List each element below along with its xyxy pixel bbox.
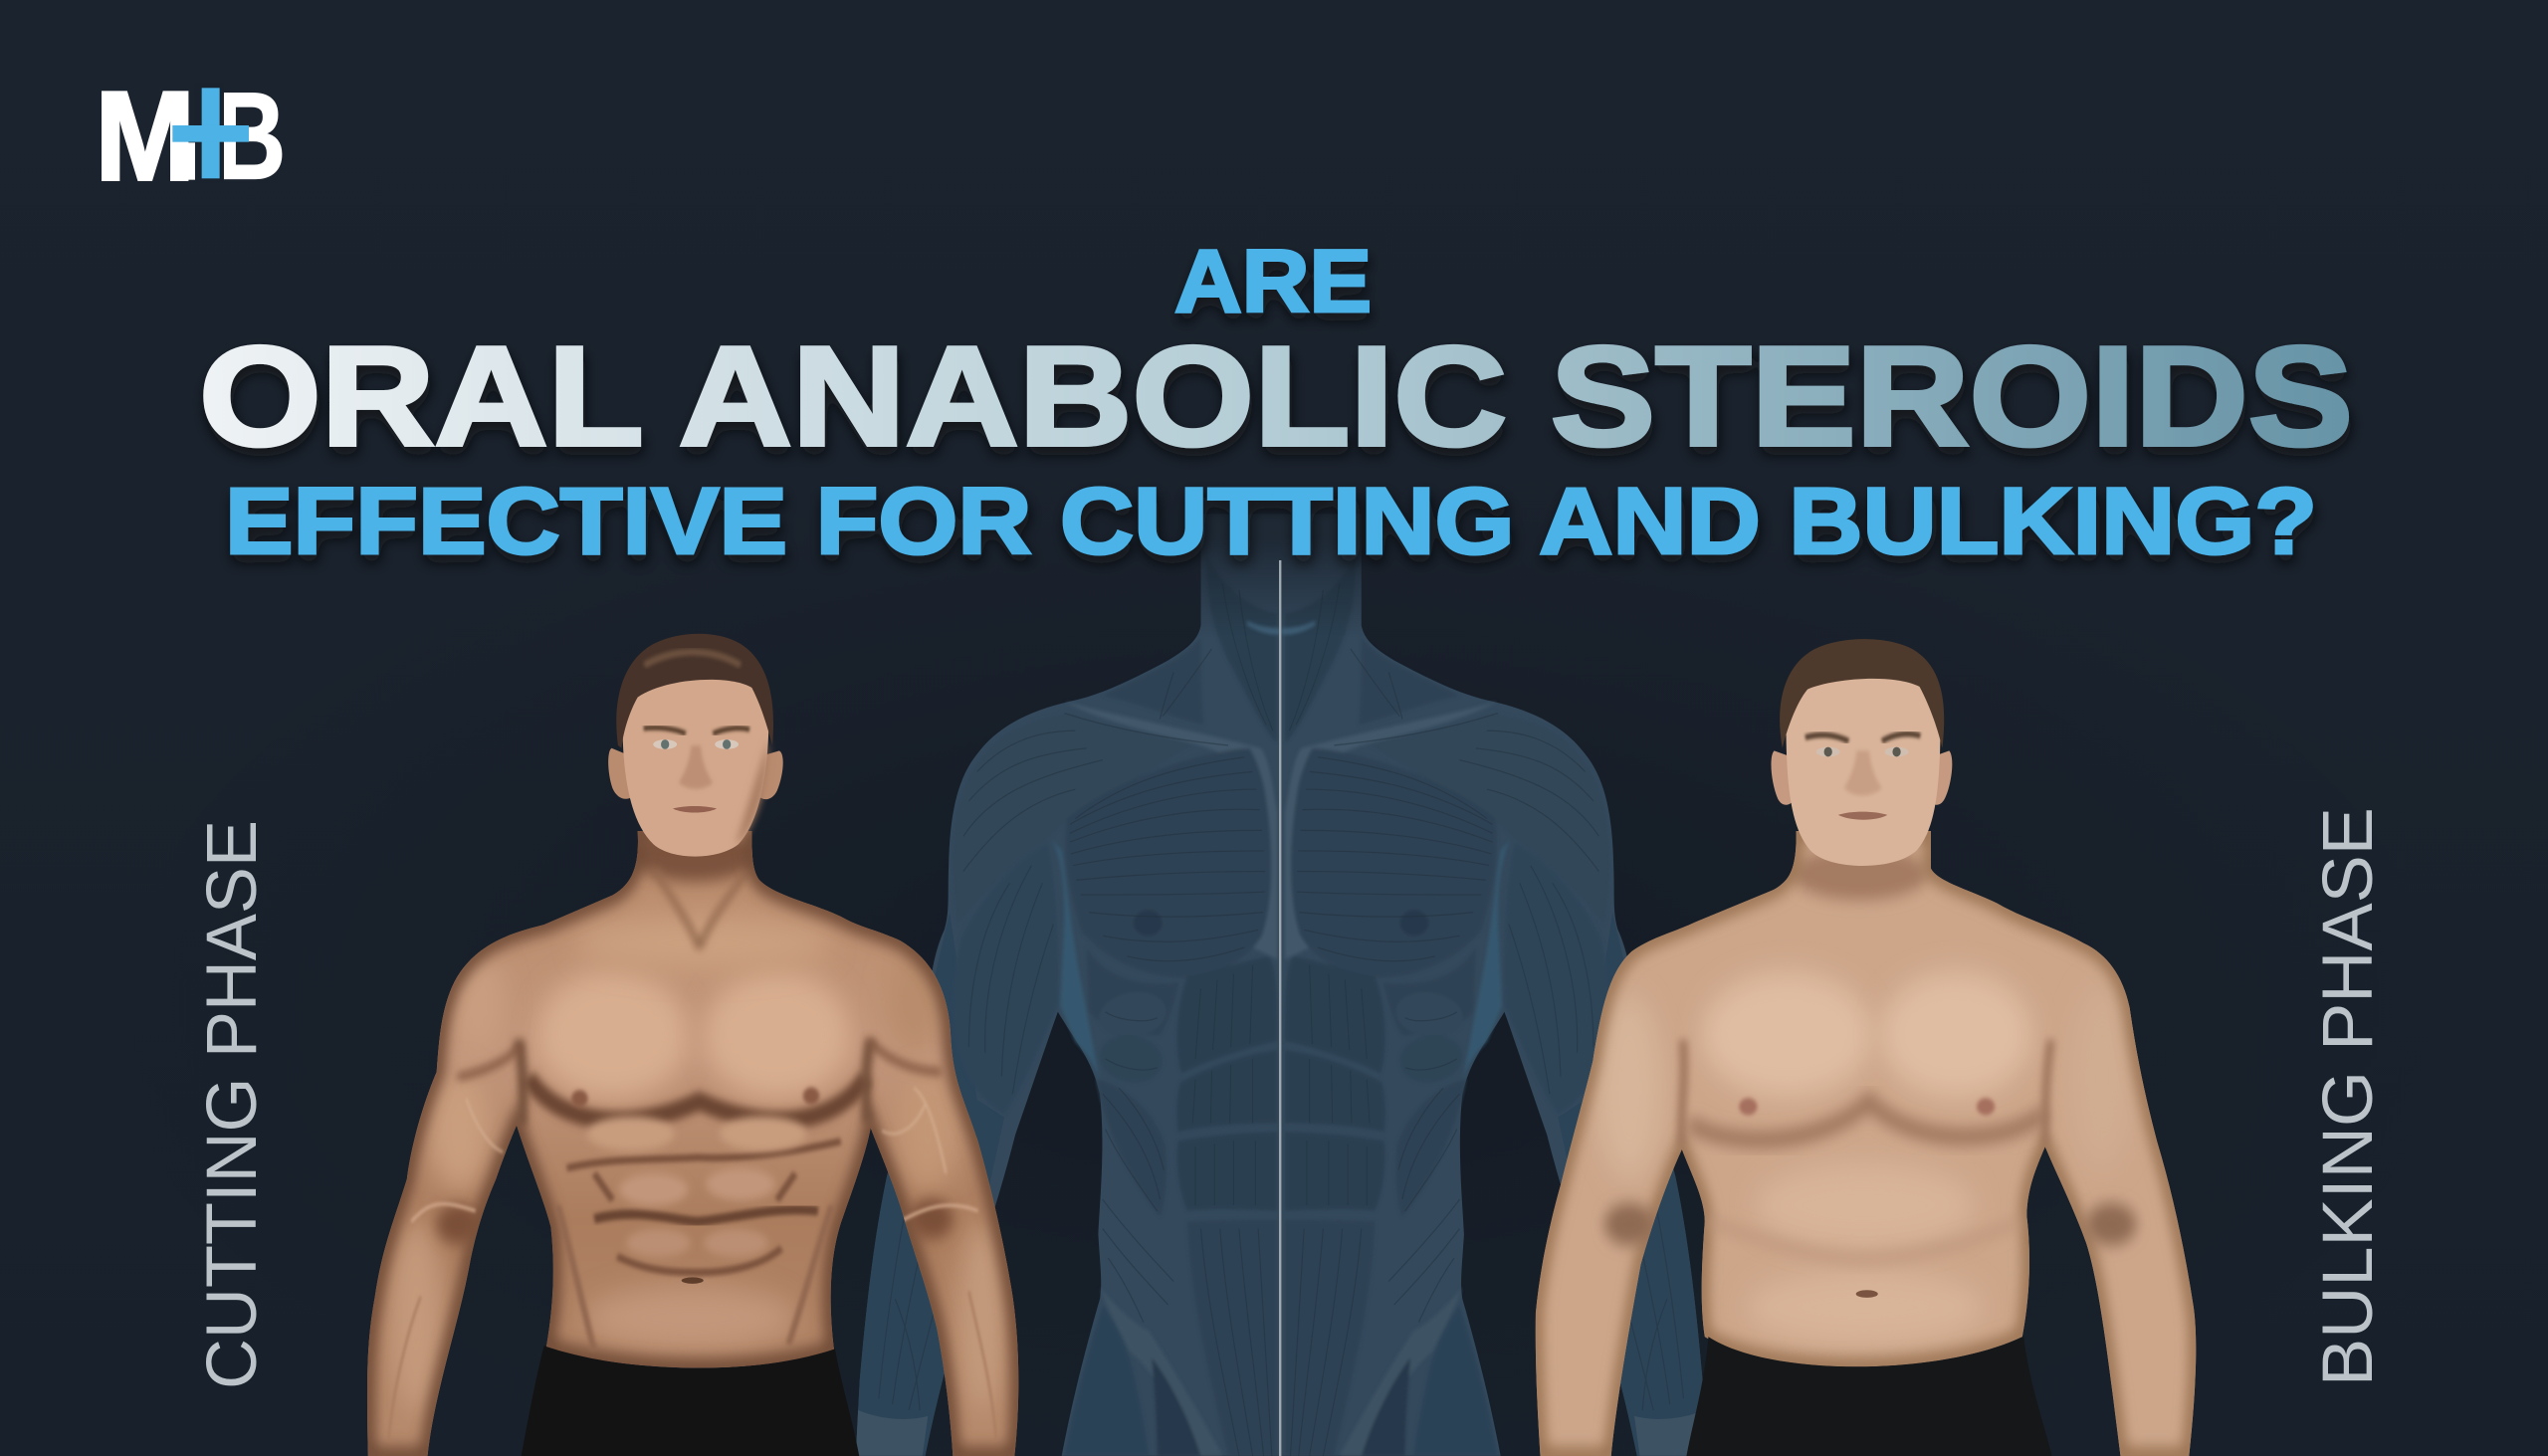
side label: cutting phase: CUTTING PHASE <box>193 820 272 1389</box>
anatomy muscle figure (centre) <box>856 514 1706 1456</box>
title line: effective for cutting and bulking: EFFECTIVE FOR CUTTING AND BULKING? <box>225 469 2317 574</box>
cutting head <box>608 634 783 857</box>
centre divider line <box>1279 560 1281 1456</box>
bulking pants <box>1686 1337 2052 1456</box>
logo: MB with blue plus <box>95 66 286 207</box>
side label: bulking phase: BULKING PHASE <box>2309 807 2388 1386</box>
title <box>199 231 2353 574</box>
logo: MB with blue plus: M <box>95 66 195 207</box>
photo figure: cutting phase <box>338 634 1055 1456</box>
photo figure: bulking phase <box>1513 639 2230 1456</box>
cutting pants <box>522 1346 859 1456</box>
title line: oral anabolic steroids: ORAL ANABOLIC STEROIDS <box>199 317 2353 476</box>
bulking head <box>1771 639 1952 866</box>
title line: are: ARE <box>1174 231 1372 330</box>
logo: MB with blue plus: B <box>214 68 286 205</box>
bulking torso and arms <box>1513 820 2230 1456</box>
cutting torso and arms <box>367 831 1019 1456</box>
